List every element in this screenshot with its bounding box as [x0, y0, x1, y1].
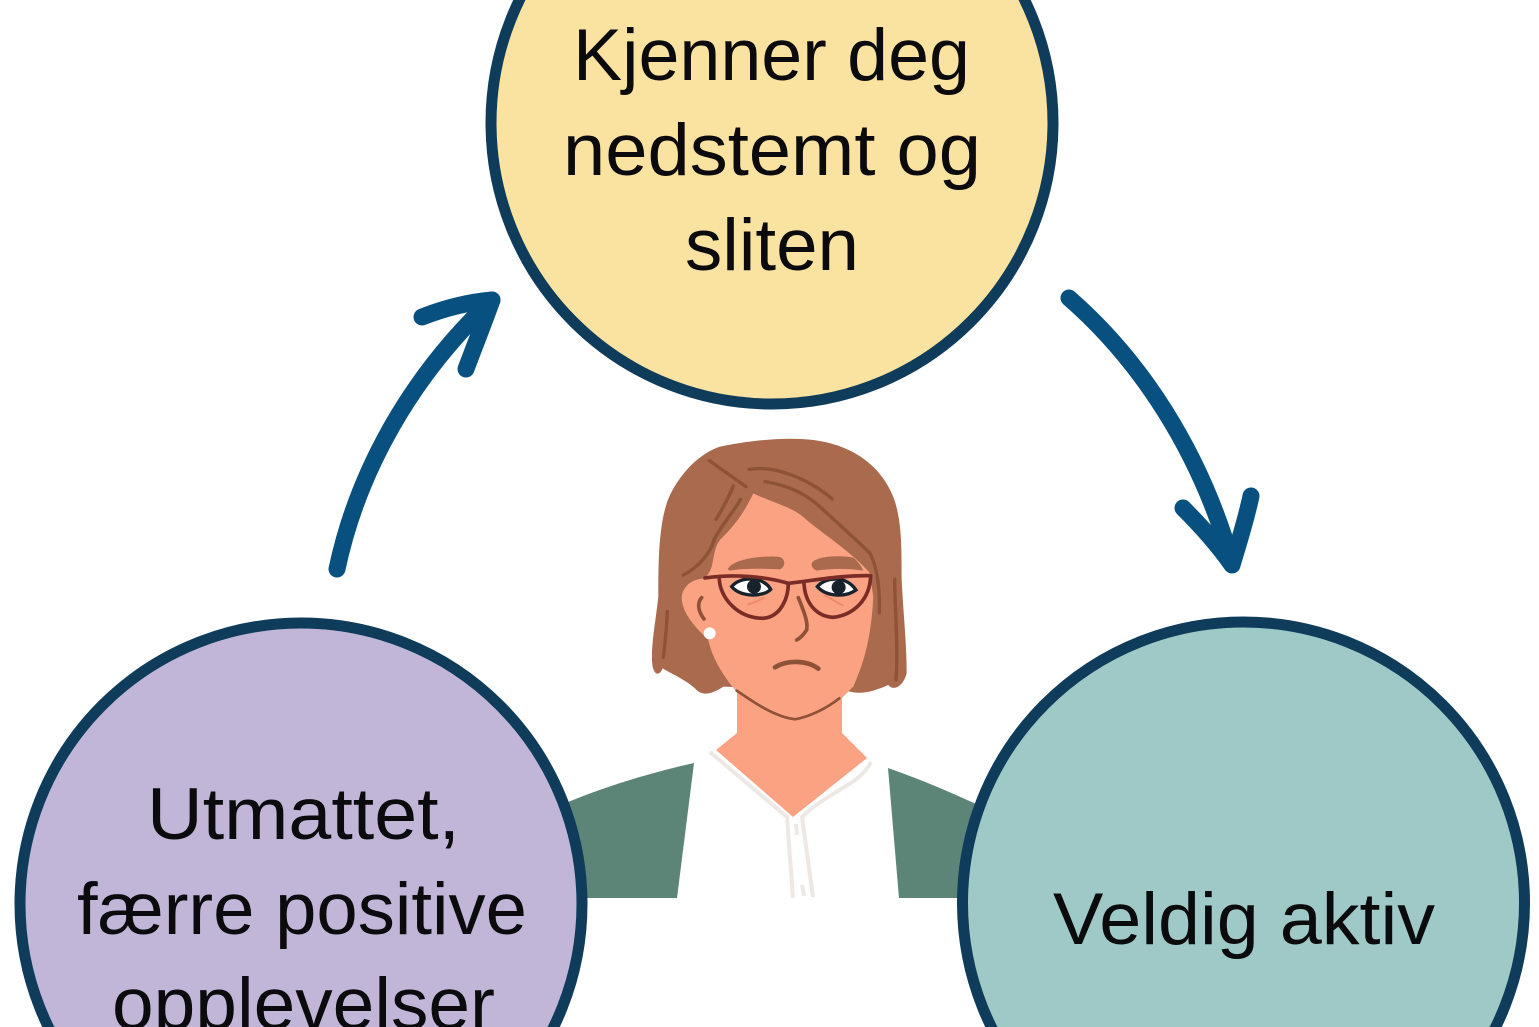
- text: Kjenner deg nedstemt og sliten: sliten: [685, 205, 859, 286]
- text: Kjenner deg nedstemt og sliten: [563, 15, 981, 286]
- circle: Kjenner deg nedstemt og sliten: [491, 0, 1053, 404]
- hair: [652, 439, 907, 694]
- eyebrows: [728, 557, 784, 571]
- circle: Utmattet, færre positive opplevelser: [20, 623, 582, 1027]
- under-eye marks: [748, 596, 843, 605]
- text: Utmattet, færre positive opplevelser: færre positive: [77, 869, 527, 950]
- head: [652, 439, 907, 719]
- glasses: [705, 576, 871, 618]
- circle: Veldig aktiv: [962, 622, 1524, 1027]
- earring: [704, 627, 716, 639]
- collar: [710, 752, 871, 898]
- text: Utmattet, færre positive opplevelser: Utmattet,: [147, 774, 460, 855]
- eyes: [732, 579, 771, 595]
- arrow: yellow to teal: [1069, 298, 1251, 565]
- hair strands: [663, 461, 897, 719]
- neck: [716, 690, 867, 817]
- illustration: tired woman: [568, 439, 985, 898]
- text: Kjenner deg nedstemt og sliten: nedstemt og: [563, 110, 981, 191]
- arrow: purple to yellow: [337, 300, 492, 569]
- text: Kjenner deg nedstemt og sliten: Kjenner deg: [573, 15, 970, 96]
- text: Veldig aktiv: Veldig aktiv: [1053, 879, 1436, 960]
- face: [682, 493, 873, 719]
- text: Utmattet, færre positive opplevelser: [77, 774, 527, 1027]
- jacket: [568, 763, 985, 898]
